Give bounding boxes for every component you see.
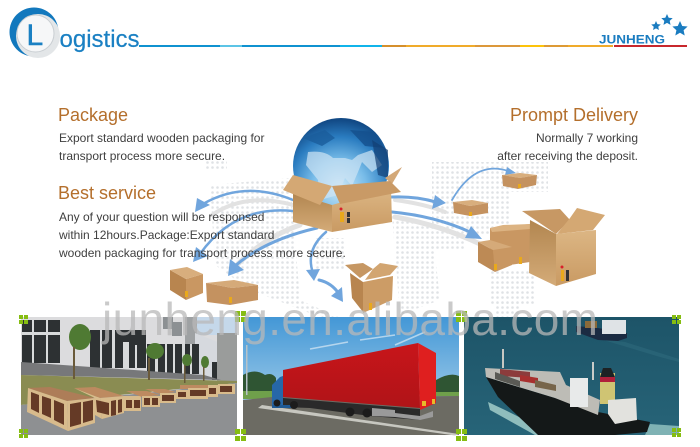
brand logo: JUNHENG [599,14,688,46]
watermark: junheng.en.alibaba.com [100,293,598,345]
box group: bottom right [478,208,605,286]
brand logo: JUNHENG: JUNHENG [599,34,665,46]
text block: prompt delivery: after receiving the deposit. [497,149,638,163]
photo: wooden crates at factory [21,317,237,435]
logo badge: L [26,19,43,52]
globe [293,118,389,214]
text block: package: Export standard wooden packaging for [59,131,264,145]
text block: best service [58,183,346,260]
shipping arrows [193,167,516,302]
text block: package [58,105,264,163]
text block: prompt delivery: Normally 7 working [536,131,638,145]
text block: best service: Any of your question will be responsed [59,210,264,224]
arrow shadows [212,200,480,270]
corner markers [19,311,681,441]
logo badge [10,8,60,58]
photo: red truck [243,317,459,436]
photo: container ship [464,317,679,435]
small box: left [170,267,203,300]
text block: best service: Best service [58,183,156,203]
main open box [283,167,402,232]
text block: package: transport process more secure. [59,149,225,163]
text block: best service: wooden packaging for transport process more secure. [58,246,346,260]
open box: center [345,263,398,313]
small box: top right [502,173,537,189]
flat box: left [206,280,258,305]
text block: prompt delivery: Prompt Delivery [510,105,638,125]
text block: prompt delivery [497,105,638,163]
text block: best service: within 12hours.Package:Export standard [58,228,274,242]
title: ogistics [60,26,140,53]
small box: middle right [453,200,488,216]
header rule [139,45,687,47]
dotted world map [205,160,548,320]
text block: package: Package [58,105,128,125]
